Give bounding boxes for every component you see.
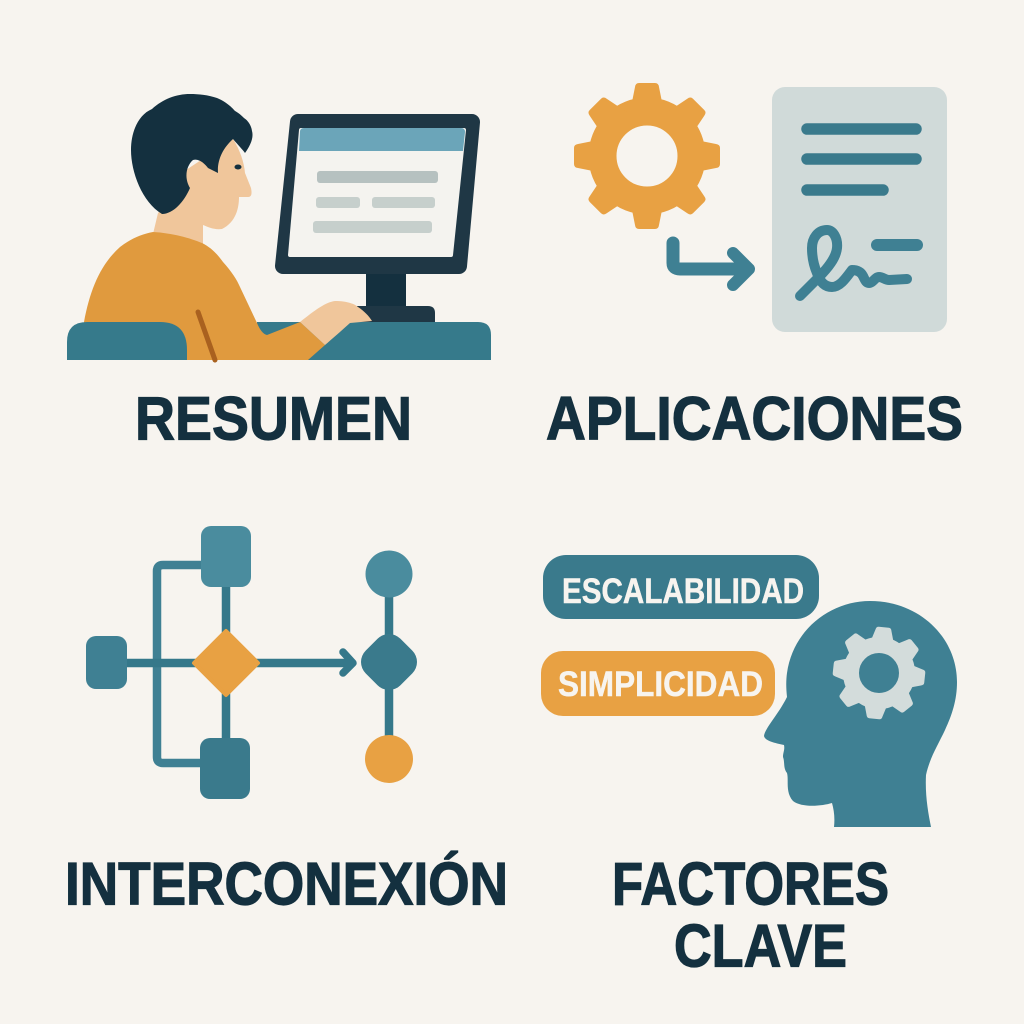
- icon: monitor screen: [290, 130, 464, 255]
- icon: signature: [800, 230, 917, 296]
- icon: monitor frame: [283, 122, 472, 266]
- icon: monitor base: [357, 306, 435, 323]
- icon: hand: [300, 301, 372, 345]
- node: bottom square: [200, 738, 250, 799]
- icon: person torso and arm: [84, 232, 325, 360]
- icon: person face and neck: [153, 139, 252, 246]
- icon: document: [772, 87, 947, 332]
- icon: head silhouette: [764, 601, 957, 827]
- arrow: flow: [343, 652, 353, 673]
- pill: escalabilidad: [543, 555, 819, 619]
- panel: aplicaciones illustration: [574, 83, 947, 332]
- connectors: [125, 565, 389, 763]
- node: right orange circle: [365, 735, 413, 783]
- arrow: gear to document: [673, 243, 749, 285]
- icon: orange gear: [574, 83, 720, 229]
- heading: factores clave: [612, 850, 889, 980]
- node: top square: [201, 526, 251, 587]
- node: orange diamond: [194, 631, 258, 695]
- icon: desk: [257, 322, 491, 360]
- pill: escalabilidad: ESCALABILIDAD: [562, 572, 804, 611]
- node: left square: [86, 636, 127, 689]
- pill: simplicidad: SIMPLICIDAD: [558, 665, 763, 704]
- icon: hair: [131, 94, 253, 214]
- icon: monitor stand: [366, 272, 406, 308]
- icon: document text lines: [807, 129, 916, 190]
- heading: interconexion: INTERCONEXIÓN: [65, 850, 508, 918]
- icon: gear in head: [832, 626, 926, 720]
- heading: factores clave: FACTORES: [612, 850, 889, 918]
- panel: resumen illustration: [67, 94, 491, 360]
- heading: resumen: RESUMEN: [135, 384, 412, 452]
- icon: screen content lines: [313, 171, 438, 233]
- node: right top circle: [366, 550, 412, 598]
- pill: simplicidad: [541, 651, 775, 716]
- icon: sleeve crease: [198, 312, 215, 360]
- heading: aplicaciones: APLICACIONES: [546, 384, 963, 452]
- icon: chair back: [67, 322, 187, 360]
- heading: factores clave: CLAVE: [674, 912, 847, 980]
- panel: factores clave illustration: [541, 555, 957, 827]
- panel: interconexion flow diagram: [86, 526, 413, 799]
- icon: screen header bar: [299, 128, 465, 151]
- node: right dark diamond: [377, 650, 401, 674]
- icon: eye: [234, 164, 242, 170]
